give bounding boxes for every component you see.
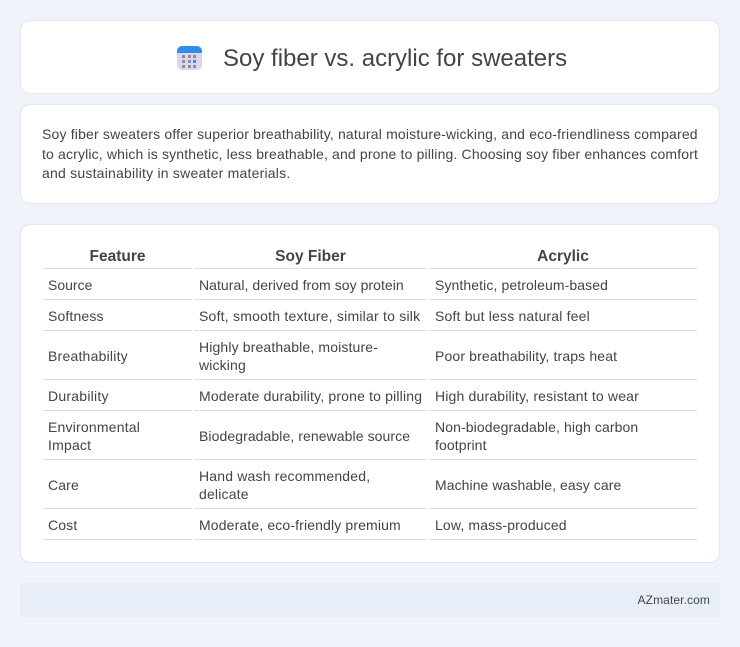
Environmental Impact: soy: Biodegradable, renewable source (199, 428, 410, 444)
Care: soy: delicate (199, 486, 249, 502)
row: Softness: Softness (48, 308, 104, 324)
row: Cost: Cost (48, 517, 77, 533)
Breathability: soy: Highly breathable, moisture- (199, 339, 378, 355)
row: Source: Source (48, 277, 92, 293)
footer credit: AZmater.com (638, 593, 710, 607)
Durability: acrylic: High durability, resistant to wear (435, 388, 639, 404)
panel: comparison table card (20, 224, 720, 563)
summary text (42, 126, 698, 181)
Environmental Impact: acrylic (435, 419, 638, 453)
Care: soy: Hand wash recommended, (199, 468, 370, 484)
Cost: soy: Moderate, eco-friendly premium (199, 517, 401, 533)
Environmental Impact: acrylic: Non-biodegradable, high carbon (435, 419, 638, 435)
summary text: and sustainability in sweater materials. (42, 165, 290, 181)
Durability: soy: Moderate durability, prone to pilling (199, 388, 422, 404)
row: Care: Care (48, 477, 79, 493)
Breathability: soy: wicking (199, 357, 246, 373)
Environmental Impact: acrylic: footprint (435, 437, 487, 453)
summary text: to acrylic, which is synthetic, less breathable, and prone to pilling. Choosing soy fiber enhances comfort (42, 146, 698, 162)
Care: acrylic: Machine washable, easy care (435, 477, 621, 493)
summary text: Soy fiber sweaters offer superior breathability, natural moisture-wicking, and eco-friendliness compared (42, 126, 698, 142)
row: Environmental Impact: Environmental (48, 419, 140, 435)
panel: summary card (20, 104, 720, 204)
row: Durability: Durability (48, 388, 109, 404)
panel: title card (20, 20, 720, 94)
header: Soy Fiber: Soy Fiber (275, 248, 346, 265)
title: Soy fiber vs. acrylic for sweaters (223, 45, 567, 72)
Source: acrylic: Synthetic, petroleum-based (435, 277, 608, 293)
icon: calendar (177, 46, 202, 70)
row: Breathability: Breathability (48, 348, 128, 364)
footer bar (20, 583, 720, 617)
Cost: acrylic: Low, mass-produced (435, 517, 567, 533)
row: Environmental Impact (48, 419, 140, 453)
row: Environmental Impact: Impact (48, 437, 91, 453)
Source: soy: Natural, derived from soy protein (199, 277, 404, 293)
Care: soy (199, 468, 370, 502)
Softness: acrylic: Soft but less natural feel (435, 308, 590, 324)
Softness: soy: Soft, smooth texture, similar to silk (199, 308, 420, 324)
Breathability: soy (199, 339, 378, 373)
Breathability: acrylic: Poor breathability, traps heat (435, 348, 617, 364)
header: Acrylic: Acrylic (537, 248, 589, 265)
header: Feature: Feature (90, 248, 146, 265)
